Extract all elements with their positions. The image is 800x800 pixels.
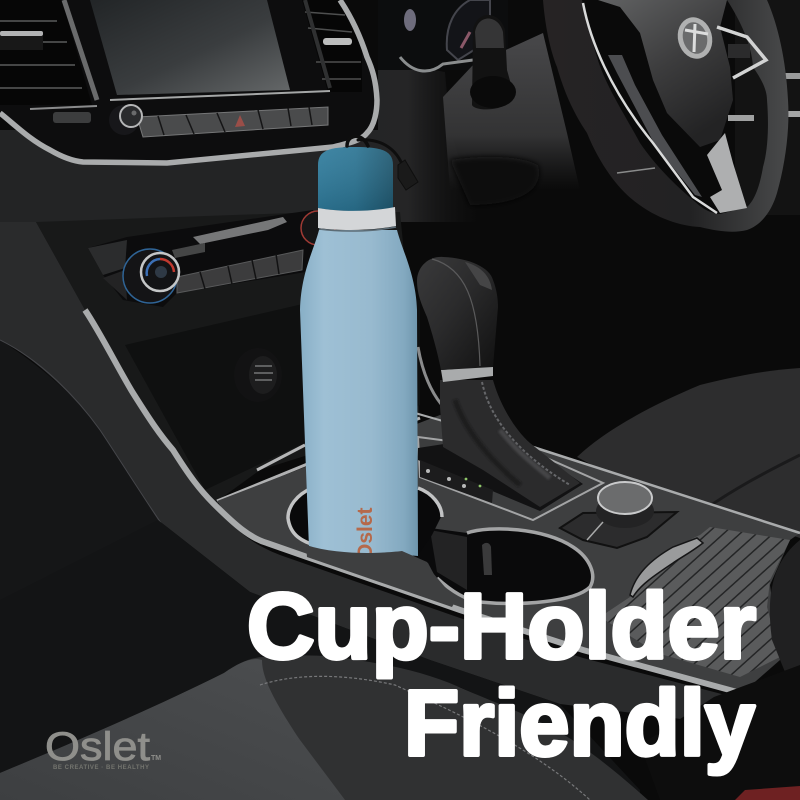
- cup holder front lip over bottle: [306, 545, 456, 607]
- right air vent: [302, 0, 362, 92]
- first cup holder: [288, 488, 442, 555]
- climate control panel: [88, 210, 335, 307]
- left side panel: [0, 222, 737, 780]
- drive mode strip: [420, 460, 493, 503]
- upper dashboard surface: [0, 60, 480, 222]
- steering column panel: [443, 33, 580, 190]
- hub: [598, 0, 733, 147]
- right dark seat bolster: [770, 540, 800, 690]
- right spoke bracket: [717, 27, 766, 78]
- spoke chrome: [608, 55, 702, 197]
- touchscreen: [90, 0, 290, 95]
- lower center well: [125, 300, 420, 501]
- center stack panel: [36, 212, 420, 510]
- title: Cup-Holder Friendly: [247, 574, 756, 775]
- trademark: TM: [151, 755, 161, 762]
- gear boot pad: [418, 440, 583, 511]
- center console: [85, 310, 800, 695]
- brand wordmark: Oslet: [45, 725, 150, 769]
- gear boot: [440, 380, 580, 507]
- lower right shadow: [640, 665, 800, 800]
- title line one: Cup-Holder: [247, 574, 756, 678]
- left air vent: [0, 0, 92, 105]
- silver trim: [0, 0, 377, 163]
- gloss strip: [193, 217, 287, 244]
- wheel rim: [543, 0, 788, 232]
- gear knob: [417, 257, 498, 370]
- front right seat: [577, 368, 800, 538]
- silver arc behind shifter: [418, 347, 441, 404]
- instrument cluster: [378, 0, 508, 71]
- right dash slats: [728, 0, 800, 215]
- head unit bezel: [0, 0, 377, 163]
- control buttons: [137, 107, 328, 137]
- bottle logo: Oslet: [354, 507, 377, 560]
- steering wheel: [543, 0, 788, 232]
- brand tagline: BE CREATIVE · BE HEALTHY: [53, 765, 149, 771]
- water bottle: [300, 136, 418, 560]
- climate buttons: [177, 250, 303, 293]
- steering wheel badge: [673, 13, 717, 63]
- vent thumbwheel strip: [53, 112, 91, 123]
- front left seat: [0, 655, 648, 800]
- bottle carry cord: [347, 136, 418, 190]
- power outlet: [234, 348, 282, 402]
- footwell and seat gap: [0, 520, 640, 800]
- title line two: Friendly: [404, 671, 755, 775]
- bottle body: [300, 230, 418, 556]
- gear collar: [441, 366, 493, 382]
- silver lid handle: [630, 538, 703, 597]
- gear shifter: [417, 257, 580, 507]
- volume knob: [109, 105, 142, 135]
- ribbed storage cover: [600, 527, 790, 677]
- glovebox opening: [450, 157, 539, 205]
- bottle cap: [318, 147, 393, 211]
- silver console trim: [85, 310, 800, 692]
- climate knob: [123, 249, 179, 303]
- bottle silver band: [318, 207, 396, 230]
- lower shelf trim: [257, 445, 305, 470]
- second cup holder: [405, 528, 593, 603]
- gear tray surround: [418, 437, 603, 520]
- right climate knob: [301, 211, 335, 245]
- stalk: [470, 15, 516, 109]
- brand logo: [45, 725, 161, 771]
- rotary controller: [560, 482, 677, 548]
